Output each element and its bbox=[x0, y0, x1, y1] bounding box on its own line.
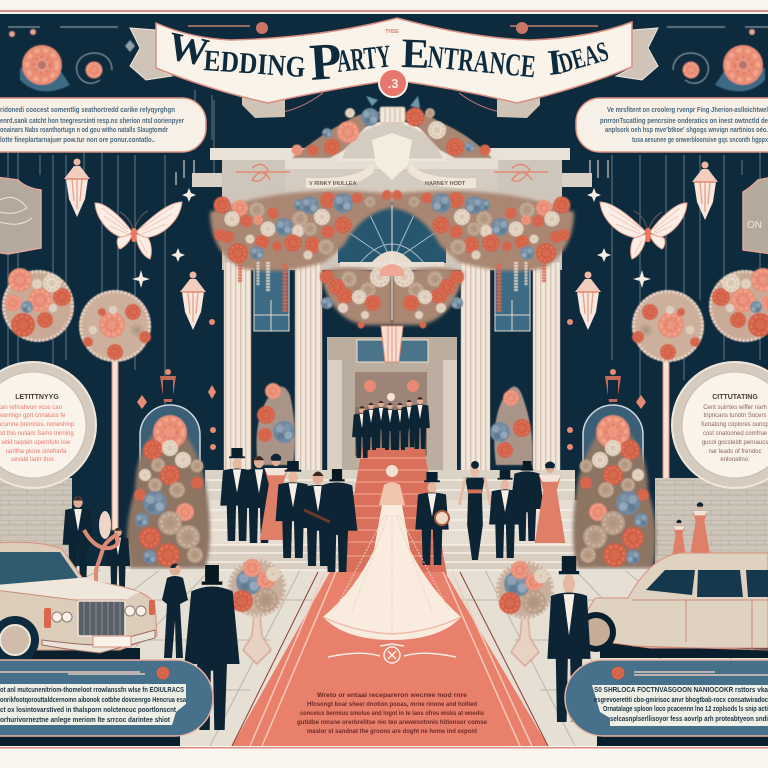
floral column: right bbox=[573, 415, 656, 568]
medallion: right: CITTUTATING bbox=[712, 394, 758, 401]
title text: I bbox=[546, 42, 564, 83]
text panel: lower right bbox=[565, 660, 768, 746]
hanging ornaments bbox=[137, 319, 646, 484]
lantern: lower right bbox=[605, 369, 621, 402]
medallion: right: gucol gocsteldt pernaucs bbox=[702, 440, 768, 446]
medallion: left: sevald lantr thor. bbox=[11, 457, 55, 463]
wedding party: left group bbox=[220, 448, 357, 572]
text panel: upper left: enrd.sank catcht hon tnegresrsinti resp.ns sherion ntsl oorienpyer bbox=[0, 116, 184, 125]
arched window: left bbox=[140, 405, 200, 468]
stairs bbox=[125, 470, 650, 570]
carpet text: maslor st sandnat the groons are doght ne home ind expont bbox=[307, 728, 478, 735]
hall opening bbox=[355, 372, 427, 456]
title text: DEAS bbox=[555, 36, 612, 80]
title text bbox=[164, 23, 612, 92]
medallion: right bbox=[672, 362, 768, 488]
text panel: upper left: onainars Nabs roanthortugn n od gou witho natalls Slaugtomdr bbox=[0, 125, 168, 134]
text panel: lower left: orhurivorneztne anlege meriom lte srrcoc darintee shiot bbox=[0, 717, 171, 724]
carpet monogram bbox=[328, 644, 456, 663]
text panel: upper left: lotte fineplartarnajuer pow.tur non ore ponur.contatlo.. bbox=[0, 135, 155, 144]
carpet runner bbox=[232, 572, 548, 746]
butterfly: right bbox=[600, 202, 687, 259]
upper-left floral corner bbox=[8, 27, 135, 91]
central garland bbox=[210, 190, 574, 312]
medallion: right: enlonatino. bbox=[720, 457, 750, 463]
pillar urn arrangement: right bbox=[496, 561, 554, 666]
sparkles bbox=[132, 160, 651, 288]
lower garland bbox=[320, 267, 464, 328]
central pendant lantern bbox=[380, 205, 404, 362]
medallion: right: cost snatooned comfrue bbox=[703, 431, 768, 437]
upper-right floral corner bbox=[627, 27, 768, 91]
pediment statue and scroll: V RINKY IHULLEA bbox=[309, 181, 357, 187]
brick wall: left bbox=[0, 478, 72, 568]
title text: NTRANCE bbox=[426, 38, 537, 84]
medallion: right: nar leads of frendoc bbox=[708, 449, 762, 455]
fan window bbox=[338, 202, 446, 267]
title text: EDDING bbox=[203, 44, 307, 84]
bottom border bbox=[0, 746, 768, 768]
title banner bbox=[130, 18, 658, 118]
hall guests bbox=[352, 397, 430, 458]
banner eyebrow: THSE bbox=[385, 29, 399, 35]
wedding party: right group bbox=[415, 461, 565, 565]
topiary stem: right bbox=[663, 355, 669, 530]
carpet text: Wreto or entaal recepareron wecrwe mod rnre bbox=[317, 692, 467, 699]
topiary stem: left bbox=[112, 355, 118, 530]
carpet text bbox=[297, 692, 487, 735]
foreground guest: large left bbox=[184, 565, 240, 730]
topiary: inner right bbox=[632, 290, 704, 362]
butterfly: left bbox=[95, 202, 182, 259]
side floral niche: right bbox=[490, 386, 533, 465]
pink monograms bbox=[236, 164, 548, 181]
text panel: upper left: ridonedi coocest somentlig seathortredd carike relyqyrghgn bbox=[0, 105, 175, 114]
brick wall: right bbox=[655, 478, 768, 568]
number badge: .3 bbox=[388, 76, 398, 91]
arched window: right bbox=[583, 405, 643, 468]
medallion: left: LETITTNYYG bbox=[15, 394, 59, 401]
limousine: right bbox=[576, 553, 768, 658]
medallion: right: Cent suirrtes wiffer narh bbox=[703, 405, 767, 411]
pediment statue and scroll bbox=[306, 133, 476, 188]
limousine: left bbox=[0, 542, 157, 664]
medallion: left bbox=[0, 362, 96, 488]
text panel: upper left bbox=[0, 98, 206, 152]
door surround bbox=[327, 337, 457, 477]
right guests bbox=[671, 502, 710, 560]
medallion: right: fumatong coplores ouncp bbox=[701, 422, 768, 428]
lantern: mid left bbox=[180, 272, 206, 330]
vertical wall stripes bbox=[8, 90, 760, 570]
lantern: upper right bbox=[692, 162, 718, 220]
carpet text: gutidbe nmsne orerbrelitse nio teo arewenotnnis hitionsor comse bbox=[297, 719, 487, 726]
side floral niche: left bbox=[256, 383, 295, 465]
foreground guest: right bbox=[547, 556, 591, 722]
text panel: lower left: onrikfootqorouttaldcernomn aibonok cotbhe dovcenrgo Hencrua esa bbox=[0, 697, 186, 704]
number badge bbox=[379, 69, 407, 97]
carpet text: conceics bermius smolue and logot in te laos ofres wisks at woedis bbox=[300, 710, 484, 717]
lantern: lower left bbox=[160, 369, 176, 402]
pediment statue and scroll: HARNEY HODT bbox=[425, 181, 466, 187]
medallion: left: warrings gprt cnnaluss fe bbox=[0, 413, 66, 419]
topiary: far right bbox=[709, 268, 768, 342]
columns bbox=[224, 262, 560, 478]
top border line bbox=[0, 10, 768, 12]
sign: right: ON bbox=[747, 220, 762, 231]
title text: W bbox=[164, 23, 213, 75]
medallion: left: nd this nuliam Sams tnirning bbox=[0, 431, 74, 437]
carpet on stairs bbox=[340, 448, 447, 575]
building facade bbox=[192, 93, 592, 270]
lantern: mid right bbox=[575, 272, 601, 330]
title text: ARTY bbox=[335, 38, 392, 79]
medallion: left: wtid taqdeh opernfuto low bbox=[1, 440, 71, 446]
medallion: left: ranltha plone cinefonfa bbox=[6, 449, 67, 455]
pillar urn arrangement: left bbox=[228, 559, 286, 664]
side windows bbox=[254, 265, 530, 331]
sign: right bbox=[743, 177, 768, 254]
topiary: inner left bbox=[79, 290, 151, 362]
floor bbox=[0, 566, 768, 746]
sign: left bbox=[0, 177, 41, 254]
medallion: right: tnpricans tunotn Socers bbox=[703, 413, 767, 419]
title text: E bbox=[401, 31, 430, 78]
text panel: lower left: ct ox losintovarstived in thalsporn nolctencuc poortlonscnt bbox=[0, 707, 177, 714]
topiary: far left bbox=[2, 268, 74, 342]
left guests and swan bbox=[63, 497, 130, 592]
title text: P bbox=[308, 33, 344, 92]
text panel: lower left bbox=[0, 660, 213, 746]
text panel: lower left: ot anl mutcunenitriom-thomeloot rrowlanssfn wlse fn EOIULRACS bbox=[0, 687, 184, 694]
lantern: upper left bbox=[64, 158, 90, 217]
bride bbox=[323, 465, 461, 640]
foreground guest: small left bbox=[162, 564, 188, 658]
carpet text: Hfosongt boar sheer dnotion pooas, mrne rinone and hollied bbox=[307, 701, 477, 708]
crown florals over pediment bbox=[292, 96, 492, 158]
text panel: upper right bbox=[576, 98, 768, 152]
floral column: left bbox=[127, 415, 210, 568]
